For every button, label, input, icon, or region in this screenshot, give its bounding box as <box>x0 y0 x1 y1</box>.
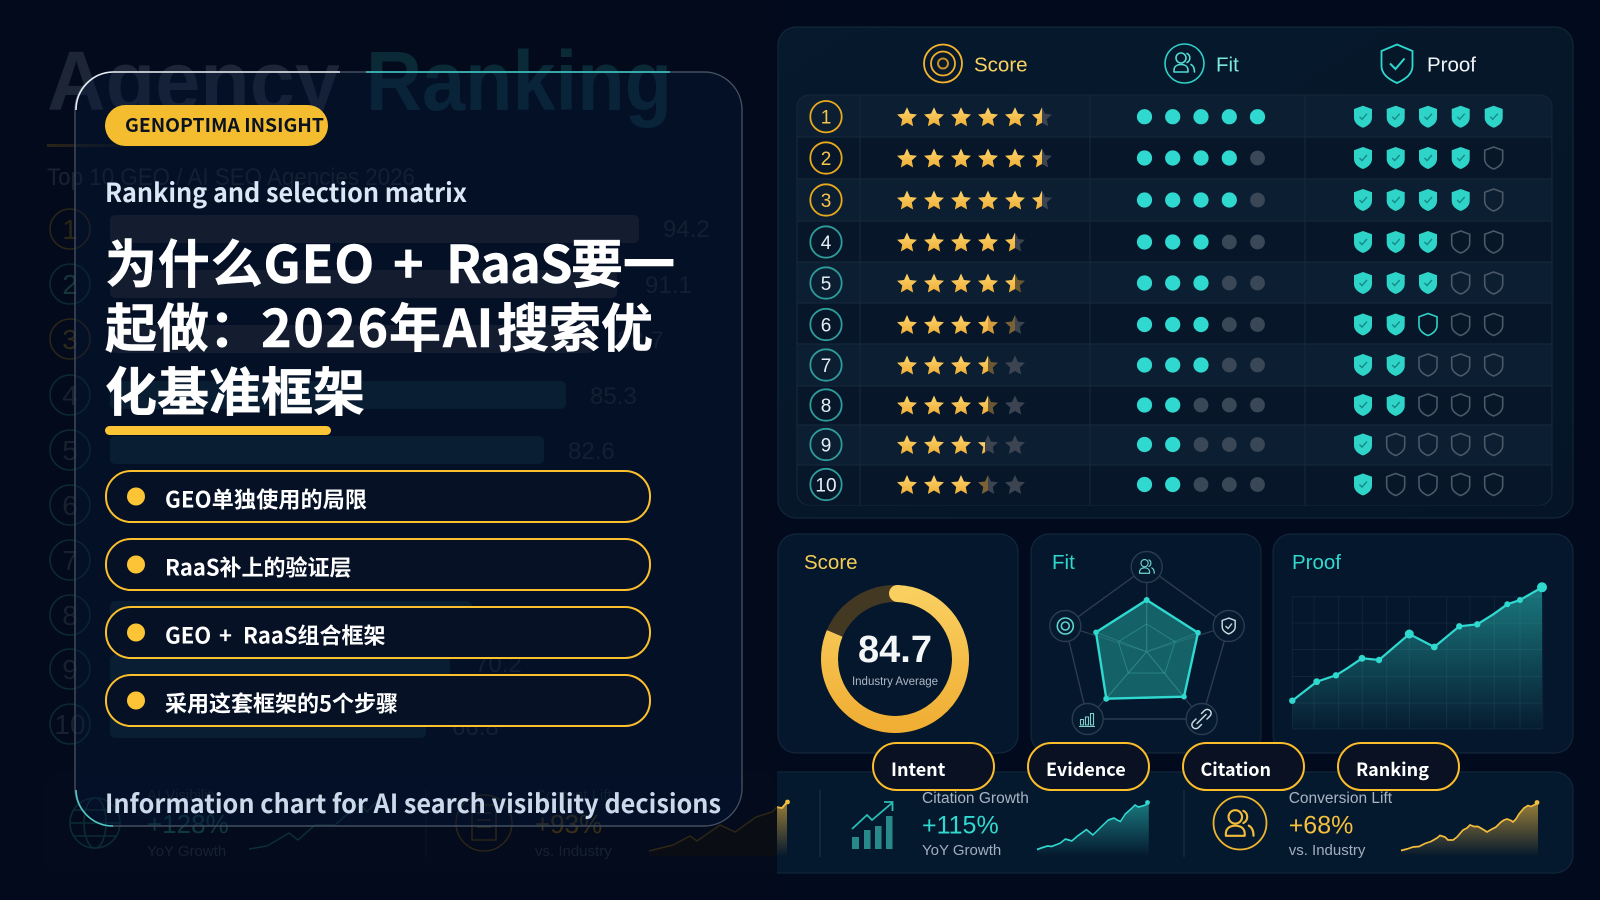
tag: ranking <box>1338 743 1459 790</box>
row 7: 7 <box>821 356 831 377</box>
row 7 <box>810 349 1503 381</box>
list item 4: 采用这套框架的5个步骤 <box>165 686 398 718</box>
panel: ranking matrix <box>778 27 1573 518</box>
divider sparkline tail <box>776 800 790 856</box>
metric: citation growth: YoY Growth <box>922 842 1001 859</box>
ghost metrics <box>43 772 777 873</box>
main heading <box>105 223 675 426</box>
list item 3 <box>106 607 650 658</box>
row 2 <box>810 142 1503 174</box>
icon: audience <box>1131 552 1162 582</box>
metric: citation growth: +115% <box>922 812 999 840</box>
ghost ranking bars <box>50 209 710 744</box>
ghost ranking bars: 94.2 <box>663 216 710 243</box>
panel: main card <box>75 72 742 826</box>
donut value: 84.7 <box>858 629 932 671</box>
list item 2 <box>106 539 650 590</box>
row 4: 4 <box>821 233 832 254</box>
metric: conversion lift: +68% <box>1289 812 1353 840</box>
icon: bars <box>1072 704 1103 734</box>
tag: intent: Intent <box>891 756 946 782</box>
matrix header: score <box>924 44 1028 82</box>
matrix table background <box>797 95 1552 505</box>
ghost ranking bars: 3 <box>62 324 78 355</box>
matrix header: proof: Proof <box>1427 54 1476 76</box>
ghost title: Ranking <box>366 34 672 128</box>
ghost ranking bars: 6 <box>62 490 78 521</box>
ghost subtitle: Top 10 GEO / AI SEO Agencies 2026 <box>47 164 415 191</box>
list item 2: RaaS补上的验证层 <box>165 550 352 582</box>
ghost ranking bars: 2 <box>62 269 78 300</box>
heading underline <box>105 426 331 435</box>
donut caption: Industry Average <box>852 676 938 688</box>
main heading: 为什么GEO <box>105 223 375 298</box>
ghost metrics: YoY Growth <box>147 843 226 860</box>
ghost title: Agency <box>47 34 340 128</box>
metric: citation growth: Citation Growth <box>922 790 1029 807</box>
score label: Score <box>804 551 858 574</box>
list item 1 <box>106 471 650 522</box>
caption: Information chart for AI search visibility decisions <box>105 784 721 821</box>
icon: growth bars <box>852 802 892 849</box>
tag: intent <box>873 743 994 790</box>
icon: link <box>1186 704 1217 734</box>
ghost ranking bars: 7 <box>62 545 78 576</box>
ghost ranking bars: 82.6 <box>568 438 615 465</box>
row 6 <box>810 309 1503 340</box>
row 3: 3 <box>821 191 831 212</box>
ghost ranking bars: 8 <box>62 600 78 631</box>
tag: evidence <box>1028 743 1149 790</box>
tag: ranking: Ranking <box>1356 756 1429 782</box>
panel: metrics strip <box>776 772 1573 873</box>
matrix header: score: Score <box>974 54 1028 76</box>
ghost ranking bars: 85.3 <box>590 383 637 410</box>
row 5: 5 <box>821 274 831 295</box>
list item 1: GEO单独使用的局限 <box>165 482 367 514</box>
main heading: 化基准框架 <box>105 351 365 426</box>
badge <box>105 105 328 146</box>
ghost metrics: +128% <box>147 809 229 839</box>
row 2: 2 <box>821 149 831 170</box>
radar chart <box>1065 567 1229 719</box>
metric: conversion lift: Conversion Lift <box>1289 790 1393 807</box>
row 10 <box>810 469 1503 500</box>
row 3 <box>810 184 1503 216</box>
ghost metrics: vs. Industry <box>535 843 612 860</box>
ghost ranking bars: 70.2 <box>475 651 522 678</box>
row 9: 9 <box>821 436 831 456</box>
main heading: + <box>393 223 424 298</box>
panel: score donut <box>778 534 1018 753</box>
main heading: 要一 <box>571 223 675 298</box>
card highlights <box>76 72 670 826</box>
icon: shield <box>1213 610 1244 642</box>
row 5 <box>810 267 1503 299</box>
main heading: RaaS <box>446 223 572 298</box>
ghost ranking bars: 5 <box>62 435 78 466</box>
list item 3: RaaS组合框架 <box>243 618 386 650</box>
subtitle: Ranking and selection matrix <box>105 173 467 210</box>
list item 3: GEO <box>165 618 211 650</box>
row 1 <box>810 101 1503 132</box>
row 8 <box>810 389 1503 421</box>
row 1: 1 <box>821 108 831 129</box>
donut chart <box>830 585 961 724</box>
ghost ranking bars: 9 <box>62 654 78 685</box>
ghost title <box>47 34 672 128</box>
tag: citation: Citation <box>1200 756 1271 782</box>
main heading: 起做：2026 <box>105 287 390 362</box>
ghost ranking bars: 88.7 <box>617 327 664 354</box>
main heading: AI <box>442 287 494 362</box>
main heading: 搜索优 <box>497 287 653 362</box>
left dimmed background <box>0 0 777 900</box>
main heading: 年 <box>389 287 441 362</box>
metric: citation growth <box>852 790 1150 859</box>
matrix header: proof <box>1382 44 1476 83</box>
list item 3: + <box>219 618 232 650</box>
row 6: 6 <box>821 316 831 336</box>
matrix header: fit: Fit <box>1216 54 1239 76</box>
icon: target <box>1050 610 1081 642</box>
icon: people circle <box>1214 796 1266 850</box>
sparkline: citation <box>1037 800 1150 856</box>
matrix header: fit <box>1165 44 1239 83</box>
tag: evidence: Evidence <box>1046 756 1126 782</box>
fit label: Fit <box>1052 551 1075 574</box>
ghost ranking bars: 4 <box>62 380 78 411</box>
row 8: 8 <box>821 396 831 417</box>
sparkline: conversion <box>1401 800 1539 856</box>
ghost ranking bars: 1 <box>62 214 78 245</box>
tag: citation <box>1183 743 1304 790</box>
ghost metrics: AI Visibility <box>147 787 220 804</box>
list item 4 <box>106 675 650 726</box>
ghost underline <box>47 144 157 147</box>
ghost metrics: Content Lift <box>535 787 613 804</box>
row 9 <box>810 429 1503 460</box>
ghost metrics: +93% <box>535 809 602 839</box>
ghost dashboard behind card <box>43 34 777 873</box>
line chart <box>1289 582 1547 729</box>
proof label: Proof <box>1292 551 1341 574</box>
ghost ranking bars: 66.8 <box>452 714 499 741</box>
panel: proof line chart <box>1273 534 1573 753</box>
panel: fit radar <box>1031 534 1261 753</box>
ghost ranking bars: 10 <box>54 709 86 740</box>
badge: GENOPTIMA INSIGHT <box>125 111 324 138</box>
row 10: 10 <box>815 476 837 496</box>
row 4 <box>810 226 1503 258</box>
metric: conversion lift: vs. Industry <box>1289 842 1366 859</box>
ghost ranking bars: 91.1 <box>645 272 692 299</box>
metric: conversion lift <box>1214 790 1539 859</box>
